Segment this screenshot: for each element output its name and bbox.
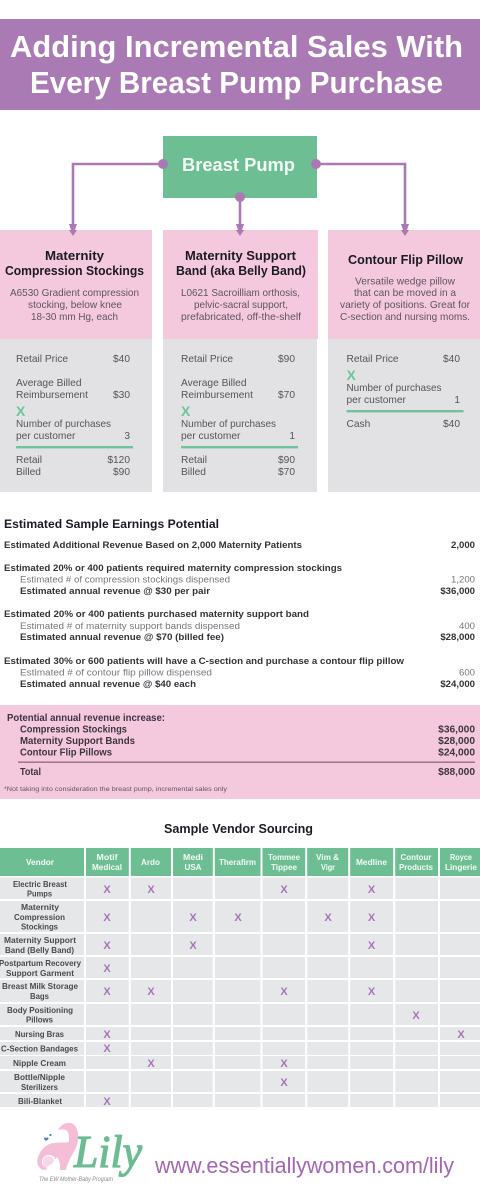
row: nipple cream [0,1056,480,1070]
row: postpartum recovery support garment: Postpartum Recovery [0,958,81,968]
panel: maternity compression stockings: $90 [113,467,130,478]
text block: support band estimate: Estimated # of maternity support bands dispensed [20,621,240,632]
text block: contour flip pillow estimate: Estimated annual revenue @ $40 each [20,679,196,690]
row: nipple cream: Nipple Cream [13,1058,66,1068]
panel: maternity compression stockings: Billed [16,467,41,478]
row: nipple cream: X [280,1058,288,1070]
table header row: Tippee [271,862,297,872]
text block: compression stockings estimate: Estimated annual revenue @ $30 per pair [20,586,210,597]
panel: maternity support band: $70 [278,467,295,478]
panel: contour flip pillow: $40 [443,354,460,365]
row: electric breast pumps: Pumps [27,888,52,898]
panel: maternity support band: $70 [278,390,295,401]
text block: support band estimate: Estimated 20% or 400 patients purchased maternity support band [4,609,309,620]
text block: support band estimate [4,609,475,643]
table header row: Contour [400,852,432,862]
panel: potential annual revenue increase: Contour Flip Pillows [20,748,112,758]
breast pump box [163,136,317,198]
table header row: Royce [450,852,472,862]
row: bottle/nipple sterilizers: X [280,1077,288,1089]
logo: lily elephant [37,1123,143,1183]
text block: contour flip pillow estimate: 600 [459,668,475,678]
row: maternity compression stockings: Maternity [21,902,59,912]
heading: estimated sample earnings potential: Estimated Sample Earnings Potential [4,517,219,531]
table header row [0,848,480,876]
panel: contour flip pillow: Retail Price [346,354,399,365]
text block: additional revenue base [4,540,475,551]
row: bili-blanket: Bili-Blanket [18,1096,62,1106]
panel: maternity compression stockings: per customer [16,431,76,442]
row: breast milk storage bags: X [103,986,111,998]
row: postpartum recovery support garment: X [103,963,111,975]
panel: maternity compression stockings: Retail [16,455,42,466]
table header row: Vim & [316,852,339,862]
panel: maternity support band: L0621 Sacroilliam orthosis, [181,288,300,299]
table header row: Medical [92,862,122,872]
row: electric breast pumps: Electric Breast [13,879,67,889]
row: maternity compression stockings: Stockings [21,922,58,932]
table header row: Vigr [321,862,336,872]
table header row: Motif [96,852,118,862]
panel: maternity support band: $90 [278,354,295,365]
text block: contour flip pillow estimate: Estimated # of contour flip pillow dispensed [20,668,212,678]
panel: contour flip pillow: Contour Flip Pillow [348,253,463,267]
panel: maternity support band: per customer [181,431,241,442]
row: nipple cream: X [147,1058,155,1070]
panel: maternity compression stockings: Number of purchases [16,419,111,430]
row: c-section bandages: C-Section Bandages [1,1044,78,1054]
text block: contour flip pillow estimate [4,656,475,690]
panel: potential annual revenue increase: Total [20,767,41,778]
row: c-section bandages: X [103,1043,111,1055]
panel: potential annual revenue increase: $36,000 [438,724,475,736]
arrow: to maternity compression stockings [69,159,168,236]
row: bili-blanket: X [103,1096,111,1108]
table header row: USA [184,862,202,872]
panel: maternity compression stockings: A6530 Gradient compression [10,288,139,299]
row: maternity compression stockings: X [234,912,242,924]
panel: maternity support band: Number of purchases [181,419,276,430]
panel: maternity support band: 1 [289,431,295,442]
row: body positioning pillows [0,1004,480,1025]
table header row: Therafirm [219,857,256,867]
panel: maternity support band: Maternity Support [185,249,297,263]
title banner: Adding Incremental Sales With [10,30,463,64]
panel: maternity support band: Band (aka Belly Band) [176,264,306,278]
panel: maternity compression stockings: X [16,403,26,419]
row: body positioning pillows: Body Positioning [7,1005,73,1015]
panel: potential annual revenue increase [0,705,480,799]
row: maternity compression stockings: X [368,912,376,924]
row: postpartum recovery support garment: Support Garment [6,968,74,978]
panel: contour flip pillow: X [346,367,356,383]
panel: maternity support band [163,230,318,492]
row: breast milk storage bags: X [280,986,288,998]
text block: compression stockings estimate: 1,200 [451,574,475,586]
row: breast milk storage bags: X [147,986,155,998]
panel: potential annual revenue increase: Potential annual revenue increase: [7,713,165,724]
panel: maternity compression stockings: 3 [124,431,130,442]
table header row: Tommee [268,852,300,862]
panel: potential annual revenue increase: Maternity Support Bands [20,736,135,747]
table header row: Medi [183,852,203,862]
row: electric breast pumps [0,878,480,899]
panel: maternity compression stockings: stocking, below knee [28,300,122,311]
row: nursing bras: X [457,1029,465,1041]
row: breast milk storage bags: Bags [30,991,49,1001]
row: maternity compression stockings [0,901,480,932]
row: electric breast pumps: X [103,884,111,896]
panel: maternity support band: $90 [278,455,295,466]
row: electric breast pumps: X [368,884,376,896]
table header row: Products [399,862,433,872]
panel: maternity compression stockings: 18-30 mm Hg, each [31,312,118,323]
table: vendor sourcing [0,848,480,1108]
row: electric breast pumps: X [147,884,155,896]
table header row: Vendor [26,857,55,867]
row: maternity compression stockings: Compression [14,912,65,922]
text block: additional revenue base: Estimated Additional Revenue Based on 2,000 Maternity Patients [4,540,302,551]
panel: contour flip pillow: C-section and nursing moms. [340,312,470,323]
panel: contour flip pillow: that can be moved in a [354,288,456,299]
panel: maternity compression stockings: Retail Price [16,354,68,365]
table header row: Ardo [141,857,160,867]
panel: maternity compression stockings: $120 [107,455,130,466]
text block: support band estimate: 400 [459,621,475,632]
panel: maternity compression stockings: Maternity [45,249,104,263]
panel: contour flip pillow: per customer [346,395,407,406]
panel: contour flip pillow: 1 [454,395,460,406]
text block: support band estimate: Estimated annual revenue @ $70 (billed fee) [20,632,224,643]
website url: www.essentiallywomen.com/lily [154,1153,455,1178]
text block: compression stockings estimate: Estimated 20% or 400 patients required maternity compression stockings [4,563,342,574]
panel: potential annual revenue increase: Compression Stockings [20,724,127,736]
row: bottle/nipple sterilizers: Bottle/Nipple [14,1072,65,1082]
panel: contour flip pillow [328,230,480,492]
row: maternity compression stockings: X [189,912,197,924]
text block: compression stockings estimate: $36,000 [440,586,475,597]
row: c-section bandages [0,1042,480,1055]
table header row: Medline [356,857,387,867]
row: maternity support band: X [189,940,197,952]
table header row: Lingerie [445,862,477,872]
logo tagline: The EW Mother-Baby Program [39,1177,113,1183]
breast pump box: Breast Pump [182,155,295,175]
row: bili-blanket [0,1094,480,1108]
panel: contour flip pillow: Number of purchases [346,383,442,394]
panel: maternity support band: Average Billed [181,378,247,389]
panel: potential annual revenue increase: *Not taking into consideration the breast pump, incremental sales only [4,786,228,793]
panel: contour flip pillow: Cash [346,419,370,430]
panel: maternity compression stockings: $40 [113,354,130,365]
text block: compression stockings estimate: Estimated # of compression stockings dispensed [20,574,230,586]
panel: maternity compression stockings: $30 [113,390,130,401]
row: breast milk storage bags: X [368,986,376,998]
panel: maternity compression stockings: Compression Stockings [5,264,144,278]
panel: maternity support band: Retail [181,455,207,466]
panel: potential annual revenue increase: $24,000 [438,748,475,758]
row: maternity compression stockings: X [103,912,111,924]
panel: maternity support band: pelvic-sacral support, [194,300,288,311]
row: nursing bras [0,1027,480,1041]
row: maternity support band: Maternity Support [4,935,76,945]
row: maternity support band: X [368,940,376,952]
text block: additional revenue base: 2,000 [451,540,475,551]
panel: maternity compression stockings: Reimbursement [16,390,88,401]
row: bottle/nipple sterilizers: Sterilizers [21,1082,58,1092]
arrow: to contour flip pillow [311,159,409,236]
row: maternity support band: Band (Belly Band) [5,945,74,955]
row: nursing bras: X [103,1029,111,1041]
logo wordmark: Lily [73,1126,143,1177]
row: maternity support band: X [103,940,111,952]
title banner [0,19,480,110]
panel: contour flip pillow: variety of positions. Great for [340,300,471,311]
row: nursing bras: Nursing Bras [15,1029,64,1039]
panel: maternity compression stockings: Average Billed [16,378,82,389]
panel: maternity support band: Retail Price [181,354,233,365]
row: breast milk storage bags [0,980,480,1002]
row: maternity compression stockings: X [324,912,332,924]
row: breast milk storage bags: Breast Milk Storage [2,981,78,991]
panel: maternity support band: X [181,403,191,419]
row: postpartum recovery support garment [0,957,480,978]
text block: compression stockings estimate [4,563,475,597]
row: bottle/nipple sterilizers [0,1071,480,1092]
row: maternity support band [0,934,480,955]
row: body positioning pillows: X [412,1010,420,1022]
text block: support band estimate: $28,000 [440,632,475,643]
panel: maternity support band: Billed [181,467,206,478]
panel: maternity support band: prefabricated, off-the-shelf [181,312,301,323]
text block: contour flip pillow estimate: Estimated 30% or 600 patients will have a C-section and purchase a contour flip pillow [4,656,405,667]
panel: potential annual revenue increase: $28,000 [438,736,475,747]
panel: potential annual revenue increase: $88,000 [438,767,475,778]
heading: sample vendor sourcing: Sample Vendor Sourcing [164,822,313,836]
row: body positioning pillows: Pillows [26,1014,53,1024]
icon: elephant mother and baby [37,1123,78,1170]
title banner: Every Breast Pump Purchase [30,66,443,100]
panel: contour flip pillow: Versatile wedge pillow [355,276,456,288]
panel: maternity support band: Reimbursement [181,390,253,401]
text block: contour flip pillow estimate: $24,000 [440,679,475,690]
arrow: to maternity support band [235,192,245,236]
panel: contour flip pillow: $40 [443,419,460,430]
panel: maternity compression stockings [0,230,152,492]
row: electric breast pumps: X [280,884,288,896]
